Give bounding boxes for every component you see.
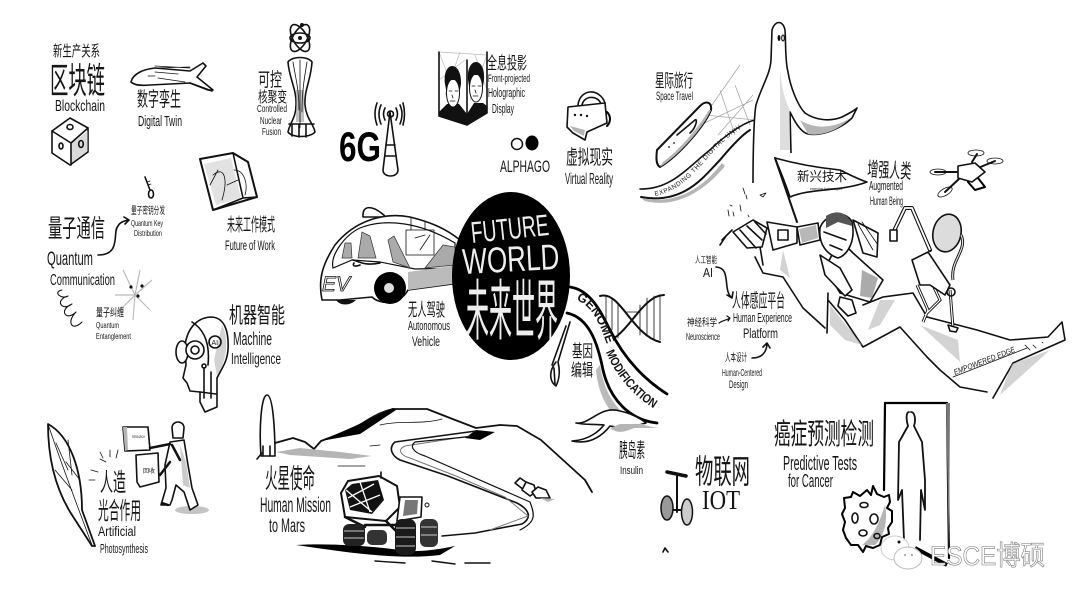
label: AlphaGo: ALPHAGO bbox=[500, 157, 550, 176]
panel: central title circle bbox=[452, 192, 570, 360]
icon: rocket bbox=[257, 395, 275, 459]
icon: DNA helix bbox=[600, 295, 664, 342]
label: Human-Centered Design: 人本设计 bbox=[725, 350, 747, 364]
title: FUTURE WORLD bbox=[461, 209, 560, 282]
panel: 6G bbox=[339, 103, 404, 176]
label: Controlled Nuclear Fusion bbox=[257, 104, 287, 138]
title: FUTURE WORLD: FUTURE bbox=[469, 209, 550, 250]
label: Human Experience Platform: Human Experience bbox=[733, 310, 792, 325]
text: 未来工作模式 bbox=[227, 215, 275, 235]
icon: airplane bbox=[131, 63, 213, 91]
icon: robot head: AI bbox=[212, 340, 218, 347]
label: Human Experience Platform bbox=[733, 310, 792, 341]
icon: fin bbox=[363, 208, 386, 217]
black circle bbox=[452, 192, 570, 360]
label: Neuroscience bbox=[686, 316, 720, 343]
label: Augmented Human Being bbox=[869, 178, 903, 208]
icon: EV car: EV bbox=[322, 273, 352, 296]
label: IOT: IOT bbox=[702, 485, 740, 515]
label: Insulin: Insulin bbox=[620, 465, 643, 477]
title: FUTURE WORLD: WORLD bbox=[461, 236, 560, 282]
label: Quantum Key Distribution bbox=[131, 204, 165, 238]
arrow: design to platform bbox=[752, 343, 770, 358]
label: Quantum Communication: Quantum bbox=[47, 249, 93, 270]
panel: quantum communication bbox=[47, 177, 165, 341]
heading: gene editing Chinese: 基因 bbox=[572, 342, 593, 361]
text: 未来世界 bbox=[466, 274, 558, 348]
heading: machine Chinese: 机器智能 bbox=[229, 303, 285, 328]
icon: robot with boxes: RESEARCH bbox=[132, 434, 145, 439]
panel: human mission to Mars bbox=[257, 395, 592, 564]
watermark: ESCE bbox=[881, 536, 1045, 571]
panel: AlphaGo bbox=[500, 136, 550, 176]
label: Blockchain: Blockchain bbox=[55, 98, 105, 115]
ribbon: genome modification: GENOME bbox=[578, 294, 614, 344]
label: Artificial Photosynthesis bbox=[98, 523, 148, 556]
panel: machine intelligence bbox=[176, 303, 285, 412]
icon: tweezers bbox=[551, 322, 570, 386]
heading: photosynthesis Chinese bbox=[98, 469, 141, 525]
label: ESCE博硕: ESCE博硕 bbox=[930, 541, 1045, 571]
panel: digital twin bbox=[131, 63, 213, 130]
label: Space Travel: Space Travel bbox=[656, 89, 693, 103]
ribbon: expanding the digital universe bbox=[639, 120, 754, 203]
banner: emerging technologies bbox=[775, 158, 867, 222]
label: Quantum Entanglement: 量子纠缠 bbox=[96, 305, 124, 319]
label: Quantum Key Distribution: Distribution bbox=[134, 229, 162, 238]
label: Machine Intelligence bbox=[231, 329, 281, 368]
figure: robot dog bbox=[890, 208, 965, 332]
label: Quantum Entanglement: Entanglement bbox=[96, 332, 132, 341]
label: Quantum Entanglement: Quantum bbox=[96, 321, 119, 330]
panel: blockchain bbox=[50, 43, 105, 165]
label: Predictive Tests for Cancer: for Cancer bbox=[788, 471, 833, 491]
icon: entanglement star bbox=[115, 270, 152, 320]
label: Human Mission to Mars bbox=[260, 494, 331, 537]
label: Human-Centered Design bbox=[722, 350, 762, 391]
label: Controlled Nuclear Fusion: Controlled bbox=[257, 104, 287, 115]
label: Controlled Nuclear Fusion: Nuclear bbox=[260, 116, 282, 127]
label: AI: 人工智能 bbox=[695, 254, 717, 265]
panel: human experience platform bbox=[686, 254, 792, 391]
label: Artificial Photosynthesis: Artificial bbox=[98, 523, 136, 539]
arrow: neuroscience to platform bbox=[719, 316, 730, 323]
icon: robot with boxes bbox=[123, 422, 209, 514]
label: Controlled Nuclear Fusion: Fusion bbox=[262, 127, 281, 138]
heading: space travel Chinese: 星际旅行 bbox=[655, 71, 693, 91]
ribbon: genome modification bbox=[566, 286, 668, 428]
label: Front-projected Holographic Display: Display bbox=[492, 101, 514, 116]
heading: 6G: 6G bbox=[339, 123, 381, 170]
label: Human Mission to Mars: to Mars bbox=[269, 516, 305, 537]
panel: human mission to Mars: 火星使命 bbox=[265, 464, 315, 494]
icon: spiral spring bbox=[58, 290, 82, 326]
mountain ridge: EMPOWERED EDGE bbox=[952, 345, 1017, 377]
banner: emerging technologies: 新兴技术 bbox=[797, 169, 847, 184]
icon: go stones bbox=[512, 136, 538, 150]
label: Front-projected Holographic Display: Front-projected bbox=[488, 73, 530, 85]
label: Insulin bbox=[619, 439, 645, 477]
label: Human-Centered Design: Human-Centered bbox=[722, 368, 762, 379]
panel: augmented human being: Human Being bbox=[870, 194, 903, 208]
heading: augmented Chinese: 增强人类 bbox=[867, 158, 912, 183]
label: Predictive Tests for Cancer: Predictive Tests bbox=[783, 453, 857, 475]
label: Autonomous Vehicle: Autonomous bbox=[408, 318, 450, 333]
icon: dice bbox=[52, 118, 88, 165]
icon: drone bbox=[930, 150, 1003, 199]
label: Quantum Communication: Communication bbox=[50, 272, 115, 289]
icon: rocket train bbox=[656, 103, 711, 167]
icon: Mars rover bbox=[296, 472, 455, 557]
mountain ridge bbox=[755, 250, 1065, 398]
icon: reactor tower bbox=[288, 58, 315, 137]
panel: holographic display bbox=[439, 52, 530, 125]
panel: artificial photosynthesis bbox=[48, 422, 209, 556]
ribbon: genome modification: MODIFICATION bbox=[606, 349, 658, 408]
label: Quantum Communication bbox=[47, 249, 115, 289]
label: Machine Intelligence: Intelligence bbox=[231, 351, 281, 368]
heading: fusion Chinese: 核聚变 bbox=[258, 89, 287, 106]
panel: space travel and digital universe figure bbox=[639, 22, 858, 203]
ribbon: expanding the digital universe: EXPANDING THE DIGITAL UNIVERSE bbox=[654, 124, 740, 196]
panel: autonomous vehicle bbox=[321, 208, 460, 349]
icon: insulin leaves bbox=[572, 410, 646, 442]
label: Human Experience Platform: Platform bbox=[743, 325, 778, 341]
label: Predictive Tests for Cancer bbox=[783, 453, 857, 491]
label: AI bbox=[695, 254, 717, 280]
heading: blockchain Chinese bbox=[50, 43, 105, 101]
label: AI: AI bbox=[703, 265, 713, 280]
mark: small caret bbox=[663, 548, 668, 552]
debris bbox=[728, 188, 766, 217]
panel: controlled nuclear fusion bbox=[257, 22, 315, 138]
panel: human experience platform: 人体感应平台 bbox=[732, 290, 785, 312]
heading: gene editing Chinese bbox=[571, 342, 593, 380]
label: Quantum Entanglement bbox=[96, 305, 132, 341]
icon: VR headset bbox=[567, 92, 610, 140]
label: Autonomous Vehicle bbox=[408, 318, 450, 349]
icon: robot with boxes: 回收 bbox=[143, 467, 155, 475]
label: Autonomous Vehicle: Vehicle bbox=[412, 333, 440, 349]
icon: segway bbox=[661, 472, 692, 525]
icon: human silhouette bbox=[898, 412, 925, 540]
panel: human mission to Mars: Human Mission bbox=[260, 494, 331, 517]
label: Front-projected Holographic Display: Holographic bbox=[488, 85, 525, 100]
heading: holographic Chinese: 全息投影 bbox=[487, 54, 527, 73]
icon: atom bbox=[286, 22, 314, 54]
grid net bbox=[690, 65, 755, 135]
icon: two faces bbox=[439, 52, 487, 125]
hills and road bbox=[275, 408, 592, 536]
label: Front-projected Holographic Display bbox=[488, 73, 530, 116]
heading: vehicle Chinese: 无人驾驶 bbox=[408, 300, 445, 320]
heading: gene editing Chinese: 编辑 bbox=[571, 361, 593, 380]
figure: tall humanoid bbox=[753, 22, 857, 183]
heading: blockchain Chinese: 新生产关系 bbox=[53, 43, 100, 60]
heading: digital twin Chinese: 数字孪生 bbox=[137, 88, 181, 111]
banner: emerging technologies: emerging technologies bbox=[810, 186, 842, 191]
icon: rocks bbox=[515, 478, 555, 502]
panel: augmented human being bbox=[720, 150, 1065, 398]
icon: screen cube bbox=[200, 153, 257, 210]
label: Quantum Key Distribution: 量子密钥分发 bbox=[131, 204, 165, 217]
arrow: to key distribution bbox=[98, 217, 129, 255]
label: Human-Centered Design: Design bbox=[729, 379, 748, 391]
panel: predictive tests for cancer bbox=[774, 403, 950, 565]
icon: leaf bbox=[48, 424, 95, 546]
heading: blockchain Chinese: 区块链 bbox=[50, 60, 105, 101]
label: Augmented Human Being: Augmented bbox=[869, 178, 903, 193]
icon: EV car bbox=[321, 216, 460, 304]
label: Digital Twin: Digital Twin bbox=[138, 113, 182, 130]
heading: cancer Chinese: 癌症预测检测 bbox=[774, 418, 874, 451]
icon: scanner doorway bbox=[884, 403, 950, 565]
label: Machine Intelligence: Machine bbox=[233, 329, 272, 349]
panel: future of work bbox=[200, 153, 276, 253]
panel: artificial photosynthesis: 光合作用 bbox=[98, 498, 141, 525]
text: Virtual Reality bbox=[565, 171, 613, 188]
heading: photosynthesis Chinese: 人造 bbox=[100, 469, 126, 497]
heading: VR Chinese: 虚拟现实 bbox=[566, 146, 613, 169]
decoration: light rays bbox=[89, 450, 118, 480]
icon: key bbox=[145, 177, 154, 198]
panel: virtual reality bbox=[565, 92, 613, 188]
ground scratches bbox=[375, 561, 490, 564]
label: Artificial Photosynthesis: Photosynthesis bbox=[100, 541, 148, 556]
icon: wechat bubbles bbox=[881, 536, 922, 569]
heading: fusion Chinese bbox=[258, 69, 287, 106]
panel: internet of things bbox=[661, 453, 750, 552]
heading: quantum Chinese: 量子通信 bbox=[48, 215, 105, 243]
icon: antenna bbox=[375, 103, 404, 176]
label: Future of Work: Future of Work bbox=[225, 237, 276, 253]
heading: IOT Chinese: 物联网 bbox=[695, 453, 750, 490]
heading: fusion Chinese: 可控 bbox=[258, 69, 282, 91]
panel: genome modification: 胰岛素 bbox=[619, 439, 645, 462]
icon: virus bbox=[842, 486, 892, 552]
arrow: AI to platform bbox=[716, 267, 733, 298]
label: Quantum Key Distribution: Quantum Key bbox=[131, 219, 163, 228]
label: Neuroscience: 神经科学 bbox=[687, 316, 717, 329]
panel: genome modification bbox=[550, 286, 668, 477]
figure: cyborg climber bbox=[720, 212, 883, 316]
label: Neuroscience: Neuroscience bbox=[686, 332, 720, 343]
